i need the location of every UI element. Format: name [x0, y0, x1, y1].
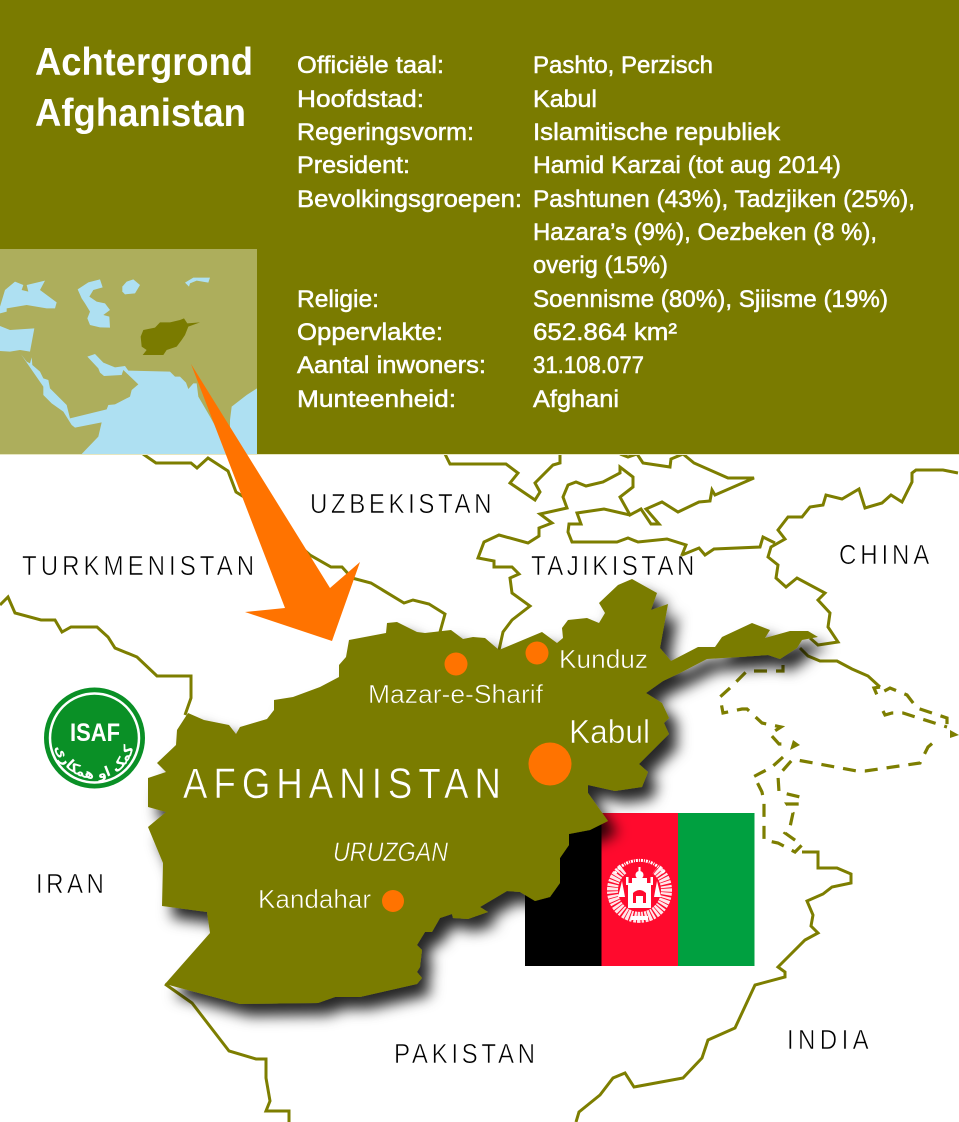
locator map — [0, 249, 257, 454]
fact labels: Aantal inwoners: — [297, 352, 486, 379]
labels inside Afghanistan: Kandahar — [258, 884, 371, 914]
fact values: overig (15%) — [533, 252, 668, 279]
fact values: Soennisme (80%), Sjiisme (19%) — [533, 286, 888, 313]
fact values: Hazara’s (9%), Oezbeken (8 %), — [533, 219, 877, 246]
country labels: TAJIKISTAN — [531, 549, 694, 581]
labels inside Afghanistan: Kabul — [569, 713, 650, 750]
country labels: TURKMENISTAN — [22, 549, 254, 581]
fact values — [533, 52, 915, 413]
map: Afghanistan shape — [148, 579, 818, 1004]
arrow — [191, 364, 360, 641]
fact labels: Regeringsvorm: — [297, 119, 474, 146]
labels inside Afghanistan — [183, 644, 650, 914]
title: Afghanistan — [35, 92, 246, 135]
ISAF badge: کمک او همکاری — [54, 744, 133, 782]
fact values: Islamitische republiek — [533, 119, 781, 146]
fact labels: Oppervlakte: — [297, 319, 443, 346]
country labels: IRAN — [36, 867, 104, 899]
country labels: CHINA — [839, 538, 930, 570]
title: Achtergrond — [35, 41, 253, 84]
panel: header — [0, 0, 959, 455]
title — [35, 41, 253, 135]
disputed borders — [720, 665, 959, 852]
country labels: INDIA — [787, 1023, 869, 1055]
fact values: Kabul — [533, 86, 597, 113]
fact values: Afghani — [533, 386, 619, 413]
fact values: 31.108.077 — [533, 352, 644, 379]
country labels — [22, 487, 930, 1069]
fact labels: Officiële taal: — [297, 52, 444, 79]
fact labels: Bevolkingsgroepen: — [297, 186, 522, 213]
flag emblem — [612, 860, 666, 920]
labels inside Afghanistan: URUZGAN — [333, 837, 448, 867]
fact labels: Munteenheid: — [297, 386, 456, 413]
fact values: Pashtunen (43%), Tadzjiken (25%), — [533, 186, 915, 213]
country labels: PAKISTAN — [394, 1037, 535, 1069]
flag of Afghanistan — [525, 813, 754, 966]
labels inside Afghanistan: Kunduz — [559, 644, 648, 674]
fact values: Pashto, Perzisch — [533, 52, 713, 79]
ISAF badge: ISAF — [70, 719, 120, 747]
fact labels: President: — [297, 152, 410, 179]
country labels: UZBEKISTAN — [310, 487, 491, 519]
labels inside Afghanistan: Mazar-e-Sharif — [368, 679, 544, 709]
fact labels: Religie: — [297, 286, 379, 313]
fact values: 652.864 km² — [533, 319, 677, 346]
fact values: Hamid Karzai (tot aug 2014) — [533, 152, 841, 179]
labels inside Afghanistan: AFGHANISTAN — [183, 760, 501, 808]
fact labels: Hoofdstad: — [297, 86, 424, 113]
city dots — [382, 642, 572, 912]
ISAF badge — [44, 688, 145, 788]
map: neighbouring country borders — [0, 454, 959, 1122]
fact labels — [297, 52, 522, 413]
